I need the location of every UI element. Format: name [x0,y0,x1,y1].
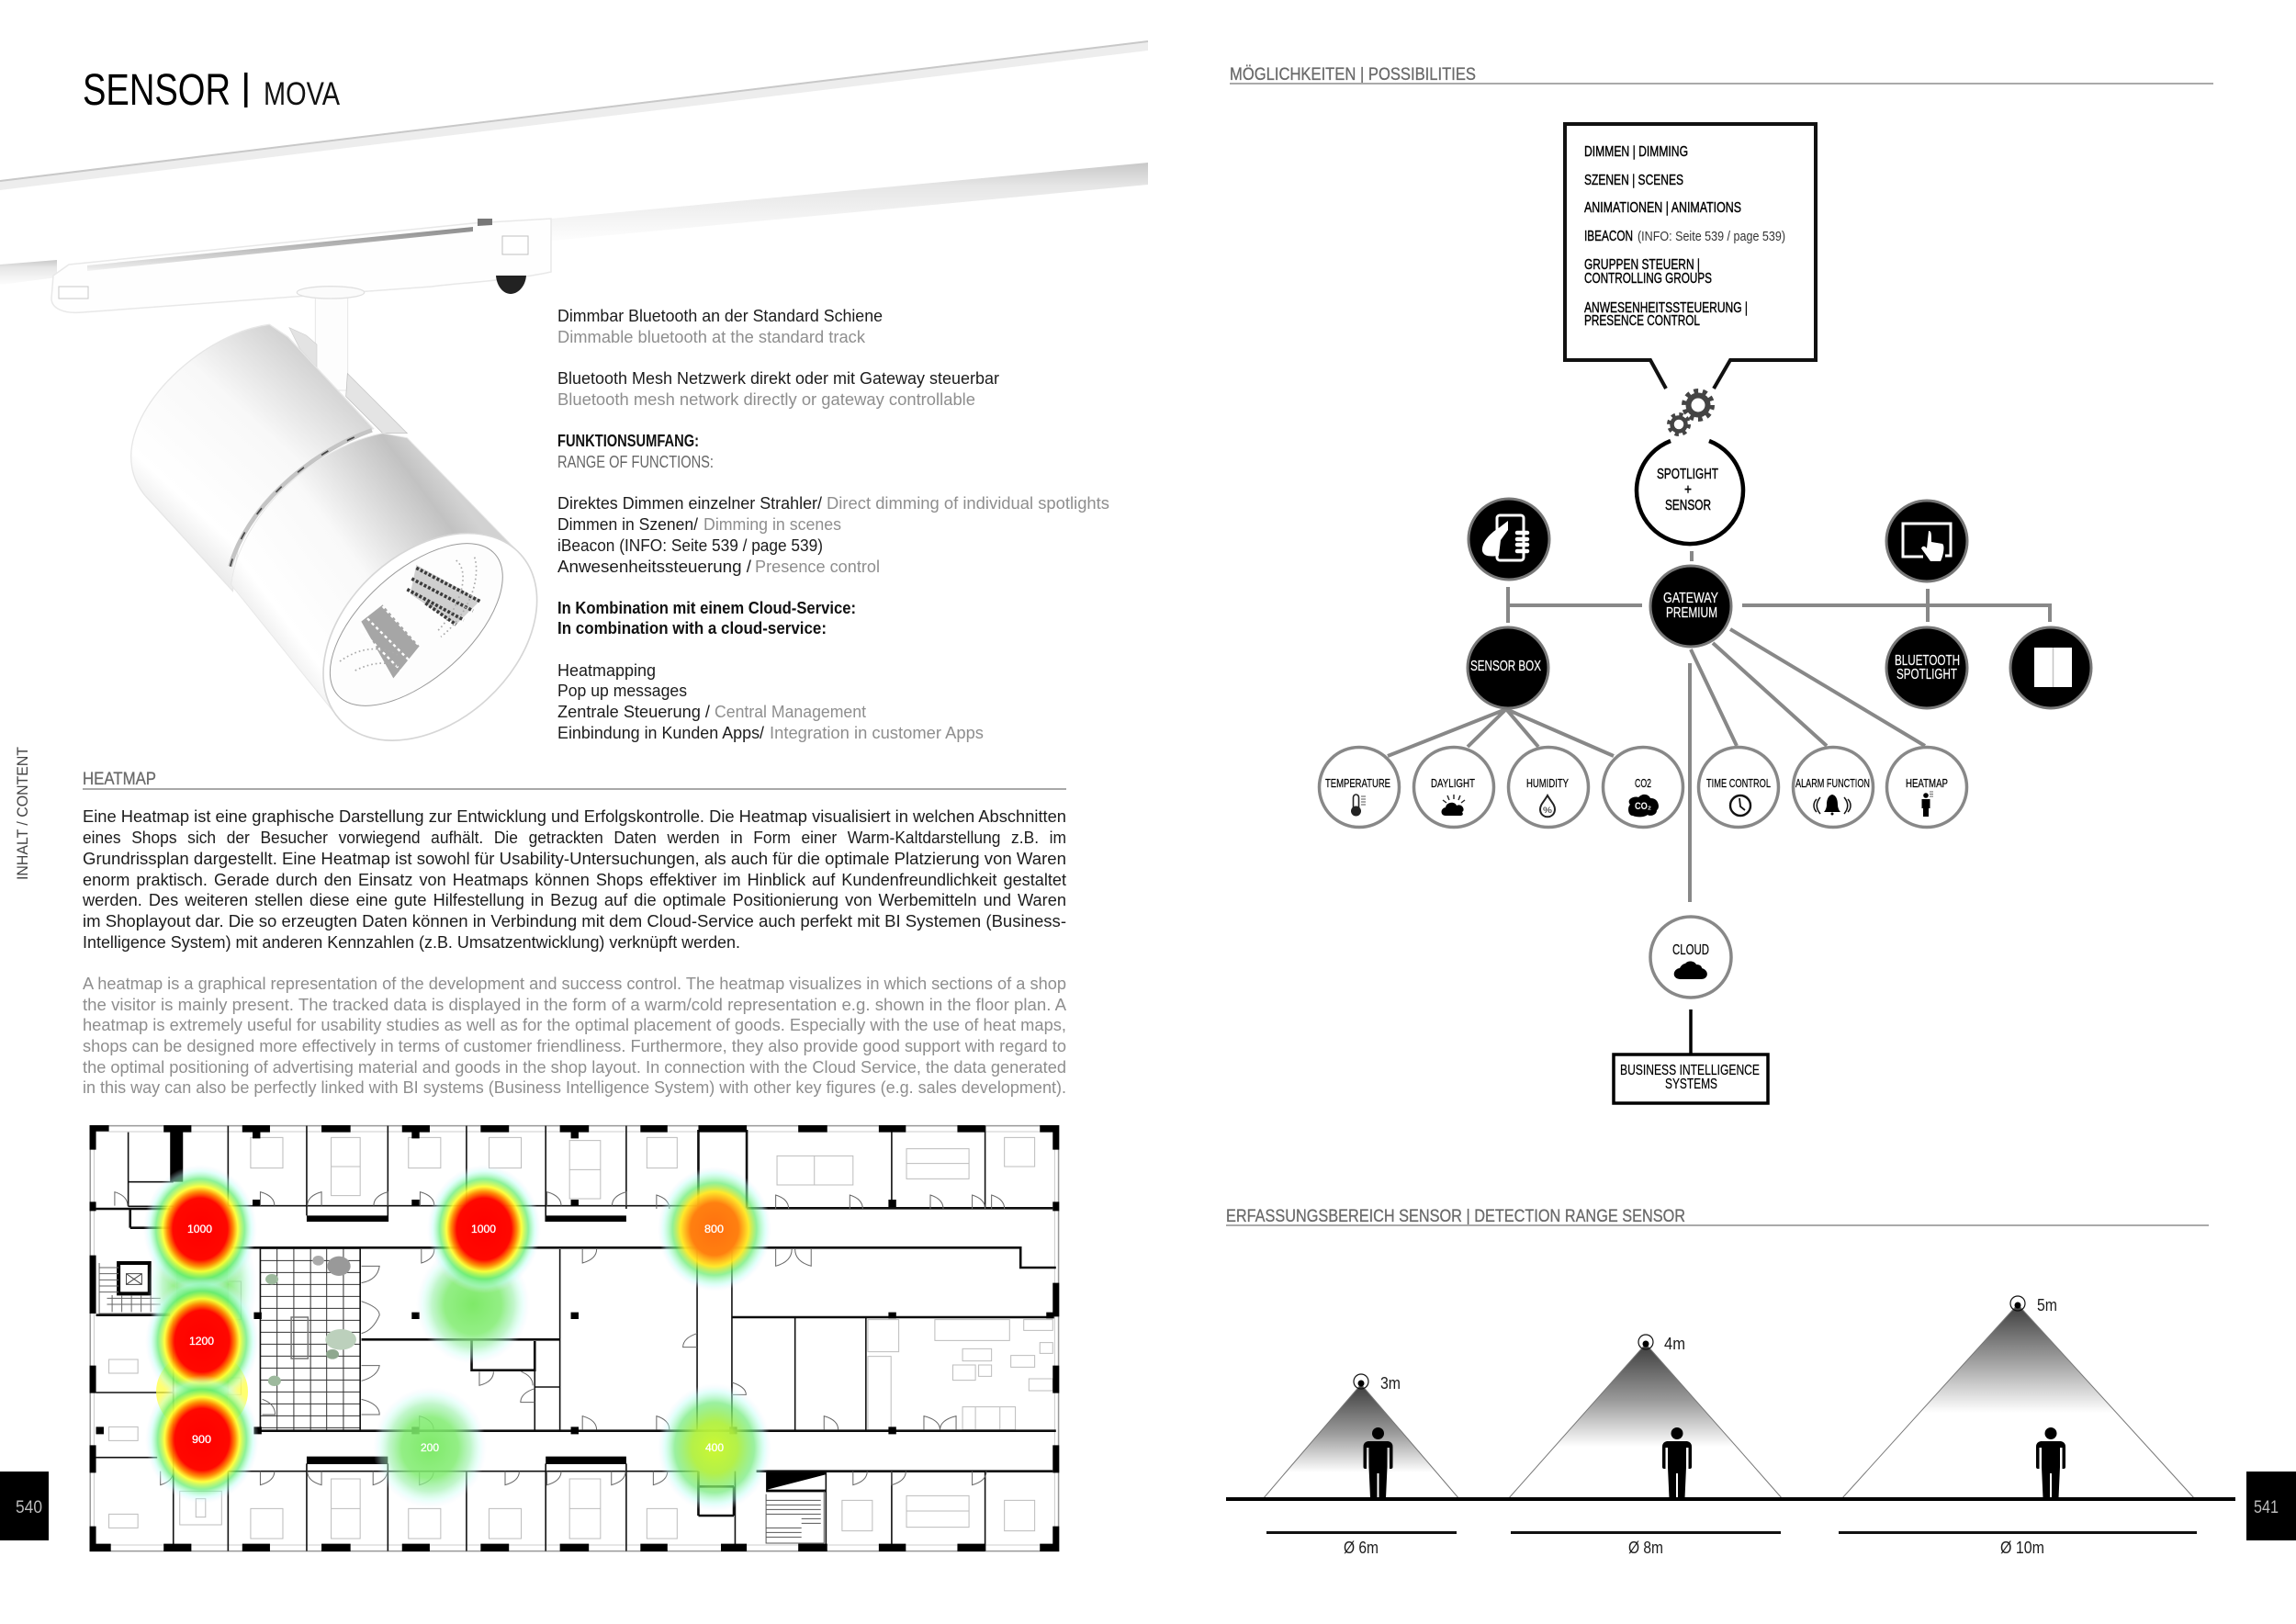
detection range diagram [1226,1296,2235,1557]
page number 541: 541 [2254,1498,2279,1517]
sensor: temperature [1319,748,1400,827]
heat spot 1200 [145,1277,259,1405]
cone 5m [1841,1296,2195,1499]
heatmap paragraph english: the optimal positioning of advertising material and goods in the shop layout. In connection with the Cloud Service, the data generated [83,1058,1066,1077]
heatmap paragraph german: Intelligence System) mit anderen Kennzahlen (z.B. Umsatzentwicklung) verknüpft werden. [83,933,740,952]
callout: functions: IBEACON [1584,229,1633,244]
heatmap paragraph german [82,807,1066,952]
node: cloud: CLOUD [1672,942,1709,958]
product description text: Zentrale Steuerung / [557,703,710,721]
diameter 8m: Ø 8m [1628,1539,1663,1557]
product description text [557,307,1109,742]
page number 540: 540 [16,1498,42,1517]
spotlight [131,287,578,782]
heatmap paragraph english: A heatmap is a graphical representation of the development and success control. The heatmap visualizes in which sections of a shop [83,975,1066,993]
product description text: Dimming in scenes [703,515,841,534]
node: spotlight + sensor: SPOTLIGHT [1657,467,1718,482]
diameter 6m [1266,1531,1457,1557]
connector lines [1388,551,2050,902]
page number 541 [2246,1472,2296,1540]
sensor: daylight: DAYLIGHT [1431,777,1475,790]
diameter 10m: Ø 10m [2000,1539,2044,1557]
product description text: Presence control [755,558,880,576]
product description text: Integration in customer Apps [770,724,984,742]
node: spotlight + sensor: + [1684,482,1692,498]
sensor: co2: CO2 [1635,777,1651,790]
node: sensor box: SENSOR BOX [1470,659,1541,674]
heatmap paragraph english [83,975,1066,1097]
icon: thermometer [1351,795,1366,816]
node: tablet [1886,501,1967,581]
product description text: RANGE OF FUNCTIONS: [557,453,714,471]
cone 4m: 4m [1664,1335,1685,1353]
sensor: humidity: HUMIDITY [1526,777,1569,790]
heat spot 1200: 1200 [189,1336,214,1348]
columns and black blocks [90,1125,1059,1551]
doors [115,1192,1005,1485]
product description text: Dimmbar Bluetooth an der Standard Schiene [557,307,883,325]
floor plan with heatmap [90,1125,1059,1551]
icon: gears [1669,391,1712,434]
page number 540 [0,1472,49,1540]
diameter 10m [1839,1531,2197,1557]
cone 3m: 3m [1380,1374,1401,1393]
icon: person [1921,792,1933,817]
product description text: iBeacon (INFO: Seite 539 / page 539) [557,536,823,555]
person 2 [1662,1427,1692,1498]
person 1 [1363,1427,1392,1498]
callout: functions: CONTROLLING GROUPS [1584,271,1712,287]
heat spot 1000 center: 1000 [471,1224,496,1235]
heat spot 1000 left: 1000 [187,1224,212,1235]
callout: functions: GRUPPEN STEUERN | [1584,257,1700,273]
cone 3m [1263,1374,1459,1499]
heatmap paragraph english: in this way can also be perfectly linked with BI systems (Business Intelligence System) with other key figures (e.g. sales development). [83,1078,1066,1097]
sensor: time control: TIME CONTROL [1706,777,1771,790]
title: SENSOR [83,66,231,115]
product description text: Einbindung in Kunden Apps/ [557,724,764,742]
box: business intelligence systems: BUSINESS INTELLIGENCE [1620,1063,1760,1078]
diameter 8m [1511,1531,1781,1557]
product photo: track rail and spotlight [0,41,1148,782]
callout: functions: ANIMATIONEN | ANIMATIONS [1584,200,1741,216]
heatmap paragraph german: im Shoplayout dar. Die so erzeugten Daten können in Verbindung mit dem Cloud-Service auch perfekt mit BI Systemen (Business- [83,912,1066,930]
node: gateway premium: PREMIUM [1666,605,1717,621]
icon: phone in hand [1482,515,1527,560]
track rail [0,41,1148,285]
diameter 6m: Ø 6m [1344,1539,1379,1557]
heat spot 800 [658,1167,771,1291]
sensor: alarm function: ALARM FUNCTION [1795,777,1870,790]
icon: cloud [1674,961,1707,979]
product description text: Bluetooth mesh network directly or gateway controllable [557,390,975,409]
title: MOVA [264,76,341,112]
thin walls [96,1126,985,1551]
heading: heatmap: HEATMAP [83,770,156,789]
heat spot 1000 center [427,1165,541,1293]
heat spot 1000 left [143,1165,257,1293]
callout: functions [1565,124,1816,389]
node: sensor box [1468,627,1548,708]
sensor: time control [1699,748,1778,827]
product description text: Dimmable bluetooth at the standard track [557,328,866,346]
node: spotlight + sensor: SENSOR [1665,498,1711,513]
box: business intelligence systems [1614,1054,1768,1103]
sensor: temperature: TEMPERATURE [1325,777,1390,790]
floor plan drawing [90,1125,1059,1551]
node: gateway premium: GATEWAY [1663,591,1718,606]
sensor: heatmap: HEATMAP [1906,777,1948,790]
thick walls [96,1130,1056,1516]
callout: functions: SZENEN | SCENES [1584,173,1683,188]
product description text: Central Management [715,703,866,721]
node: bluetooth spotlight: BLUETOOTH [1895,653,1960,669]
heat spot 200: 200 [421,1443,439,1454]
product description text: Bluetooth Mesh Netzwerk direkt oder mit Gateway steuerbar [557,369,999,388]
heatmap paragraph german: enorm praktisch. Gerade durch den Einsatz von Heatmaps können Shops effektiver im Hinblick auf Kundenfreundlichkeit gestaltet [83,871,1066,889]
product description text: Direct dimming of individual spotlights [827,494,1109,513]
node: bluetooth spotlight [1886,627,1967,708]
product description text: FUNKTIONSUMFANG: [557,432,699,450]
heatmap paragraph german: eines Shops sich der Besucher vorwiegend aufhält. Die getrackten Daten werden in Form einer Warm-Kaltdarstellung z.B. im [83,829,1066,847]
box: business intelligence systems: SYSTEMS [1665,1077,1717,1092]
node: wall switch [2010,627,2091,708]
heatmap paragraph english: shops can be designed more effectively in terms of customer friendliness. Furthermore, they also provide good support with regard to [83,1037,1066,1055]
heatmap paragraph german: Grundrissplan dargestellt. Eine Heatmap ist sowohl für Usability-Untersuchungen, als auch für die optimale Platzierung von Waren [83,850,1066,868]
heat spot 900: 900 [192,1435,211,1446]
connector: cloud to BI [1689,1009,1693,1054]
node: bluetooth spotlight: SPOTLIGHT [1896,667,1957,682]
sensor: alarm function [1793,748,1874,827]
heading: detection range: ERFASSUNGSBEREICH SENSOR | DETECTION RANGE SENSOR [1226,1207,1685,1226]
icon: co2 cloud: CO₂ [1635,801,1651,812]
icon: clock [1730,795,1750,816]
heat spot 400: 400 [705,1443,724,1454]
callout: functions: DIMMEN | DIMMING [1584,144,1688,160]
product description text: Direktes Dimmen einzelner Strahler/ [557,494,822,513]
callout: functions: PRESENCE CONTROL [1584,313,1700,329]
sensor: humidity [1508,748,1589,827]
heatmap paragraph english: heatmap is extremely useful for usability studies as well as for the optimal placement of goods. Especially with the use of heat maps, [83,1016,1066,1034]
heat spot 400 [658,1383,771,1512]
sensor: heatmap [1886,748,1967,827]
icon: water drop: % [1543,806,1552,815]
heatmap paragraph german: werden. Des weiteren stellen diese eine gute Hilfestellung in Bezug auf die optimale Positionierung von Werbemitteln und Waren [82,891,1066,909]
cone 4m [1508,1335,1783,1499]
side label: INHALT / CONTENT [14,747,31,880]
node: gateway premium [1650,566,1731,647]
product description text: In Kombination mit einem Cloud-Service: [557,599,856,617]
track adapter [51,219,551,312]
product description text: Pop up messages [557,682,687,700]
ground line [1226,1497,2235,1501]
heat spot glow column [147,1212,530,1433]
atrium grid [260,1248,360,1430]
heat spot 900 [145,1375,259,1504]
heatmap paragraph german: Eine Heatmap ist eine graphische Darstellung zur Entwicklung und Erfolgskontrolle. Die Heatmap visualisiert in welchen Abschnitten [83,807,1066,826]
product description text: Dimmen in Szenen/ [557,515,698,534]
product description text: Anwesenheitssteuerung / [557,558,751,576]
icon: tablet with hand [1903,524,1951,561]
person 3 [2036,1427,2065,1498]
icon: sun and cloud [1442,795,1465,816]
elevator and stairs [118,1263,150,1293]
cone 5m: 5m [2037,1296,2057,1314]
icon: bell [1814,795,1851,816]
callout: functions: ANWESENHEITSSTEUERUNG | [1584,300,1748,316]
sensor: daylight [1414,748,1493,827]
heading: possibilities: MÖGLICHKEITEN | POSSIBILITIES [1230,65,1476,85]
network diagram [1319,124,2091,1103]
sensor: co2 [1604,748,1683,827]
product description text: Heatmapping [557,661,656,680]
heat spot 800: 800 [704,1224,724,1235]
node: spotlight + sensor [1637,441,1743,544]
node: cloud [1650,917,1731,998]
furniture [109,1137,1052,1539]
callout: functions: (INFO: Seite 539 / page 539) [1638,229,1785,244]
node: phone [1469,499,1549,580]
product description text: In combination with a cloud-service: [557,619,827,637]
heatmap paragraph english: the visitor is mainly present. The tracked data is displayed in the form of a warm/cold representation e.g. shown in the floor plan. A [83,996,1066,1014]
heat spot 200 [373,1387,487,1508]
